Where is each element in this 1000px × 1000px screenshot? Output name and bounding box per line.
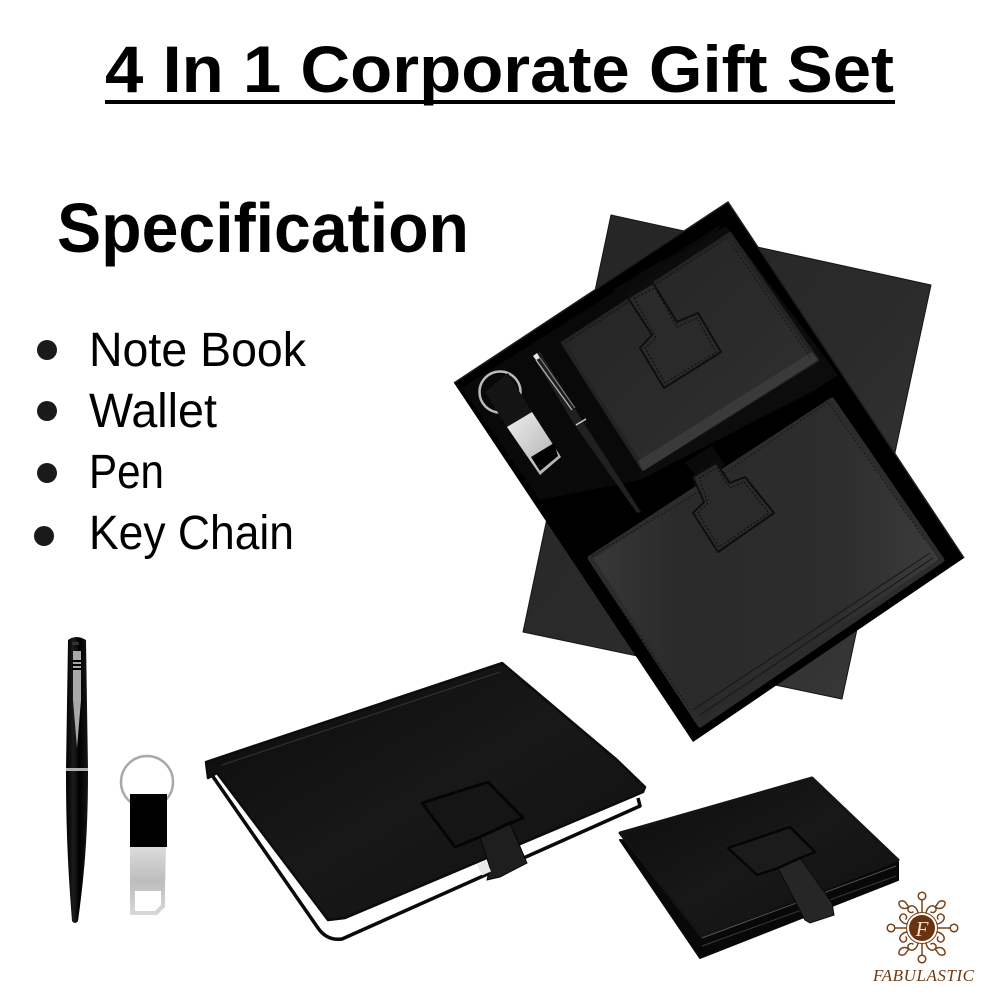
wallet strap and tab	[628, 283, 721, 388]
notebook	[206, 663, 645, 939]
boxed pen	[533, 352, 641, 513]
title: 4 In 1 Corporate Gift Set	[105, 32, 894, 106]
notebook closure tab	[422, 782, 527, 880]
list item: Pen: Pen	[89, 446, 164, 499]
gift box photo	[454, 202, 964, 742]
list item: Key Chain: Key Chain	[89, 507, 294, 560]
logo: Fabulastic	[872, 892, 975, 985]
list item: Wallet	[37, 385, 217, 438]
logo letter: F	[915, 917, 929, 941]
pen	[66, 637, 88, 923]
logo emblem	[887, 892, 958, 963]
box lid underneath	[523, 215, 931, 699]
heading: Specification: Specification	[57, 189, 469, 267]
key chain	[121, 756, 173, 915]
list item: Note Book: Note Book	[89, 324, 307, 377]
wallet closure tab	[728, 827, 834, 923]
open box tray	[454, 202, 964, 742]
specification list	[34, 324, 307, 560]
logo wordmark: FABULASTIC	[872, 966, 975, 985]
notebook strap and tab	[693, 463, 774, 552]
boxed key chain	[480, 372, 561, 475]
list item: Wallet: Wallet	[89, 385, 217, 438]
wallet	[620, 778, 898, 958]
boxed notebook	[590, 400, 942, 725]
boxed wallet	[563, 234, 818, 471]
list item: Pen	[37, 446, 164, 499]
